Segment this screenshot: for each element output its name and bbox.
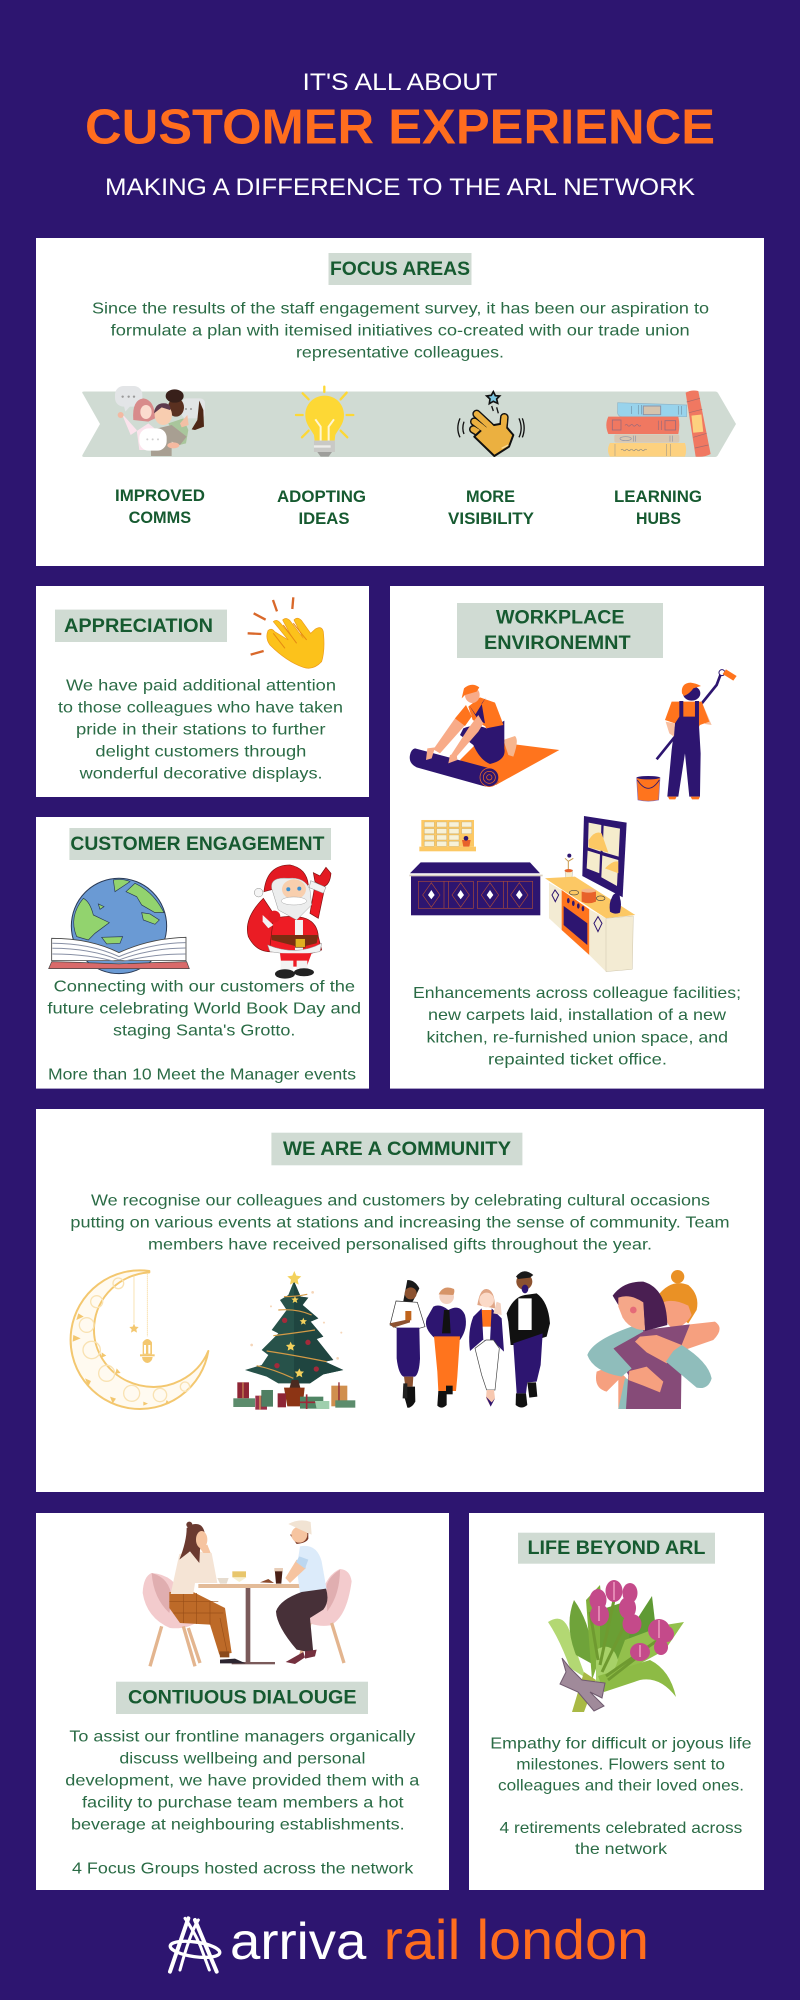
text: life beyond arl <box>490 1735 752 1858</box>
labels: focus items: HUBS <box>636 510 681 528</box>
text: focus areas intro: Since the results of the staff engagement survey, it has been our aspiration to <box>92 300 709 318</box>
icon: stack of books <box>606 390 711 457</box>
text: customer engagement: More than 10 Meet the Manager events <box>48 1066 356 1084</box>
text: continuous dialogue: beverage at neighbouring establishments. <box>71 1817 405 1834</box>
text: appreciation: delight customers through <box>95 744 306 760</box>
logo: arriva rail london: arriva <box>230 1913 366 1971</box>
title block <box>85 69 715 201</box>
heading: appreciation <box>55 610 227 642</box>
icon: santa <box>247 865 331 979</box>
text: focus areas intro <box>92 300 709 362</box>
icon: clapping hands <box>248 597 324 668</box>
heading: appreciation: APPRECIATION <box>64 616 213 637</box>
illustration: group of colleagues <box>389 1271 550 1408</box>
text: customer engagement: staging Santa's Grotto. <box>113 1022 295 1040</box>
text: life beyond arl: colleagues and their loved ones. <box>498 1777 744 1794</box>
panel: continuous dialogue <box>36 1513 449 1890</box>
panel: workplace environment <box>390 586 764 1089</box>
text: continuous dialogue: facility to purchase team members a hot <box>82 1795 404 1812</box>
text: workplace environment: new carpets laid, installation of a new <box>428 1007 726 1024</box>
text: focus areas intro: representative colleagues. <box>296 344 504 362</box>
illustration: christmas tree <box>233 1271 355 1410</box>
heading: focus areas: FOCUS AREAS <box>330 259 470 280</box>
title block: MAKING A DIFFERENCE TO THE ARL NETWORK <box>105 174 695 201</box>
illustration: painter <box>637 669 737 801</box>
text: appreciation: wonderful decorative displays. <box>78 766 323 782</box>
illustration: carpet layer <box>410 685 559 787</box>
heading: customer engagement: CUSTOMER ENGAGEMENT <box>70 834 325 855</box>
text: continuous dialogue: 4 Focus Groups hosted across the network <box>72 1861 414 1878</box>
heading: focus areas <box>328 253 472 285</box>
logo: arriva rail london <box>169 1908 649 1972</box>
panel: appreciation <box>36 586 369 797</box>
labels: focus items: IMPROVED <box>115 487 205 505</box>
panel: customer engagement <box>36 817 369 1089</box>
heading: customer engagement <box>69 828 331 860</box>
illustration: two people hugging <box>587 1270 720 1409</box>
title block: IT'S ALL ABOUT <box>302 69 498 96</box>
text: continuous dialogue: development, we have provided them with a <box>65 1773 419 1790</box>
illustration: two people at a cafe table <box>143 1520 352 1666</box>
heading: workplace environment: WORKPLACE <box>496 608 624 628</box>
text: customer engagement: Connecting with our customers of the <box>54 978 355 996</box>
text: continuous dialogue: To assist our frontline managers organically <box>69 1729 415 1746</box>
icon: people talking <box>115 386 205 456</box>
text: appreciation: pride in their stations to further <box>76 722 326 738</box>
icon: waving hand <box>458 392 524 456</box>
text: appreciation <box>58 678 343 782</box>
panel: we are a community <box>36 1109 764 1492</box>
labels: focus items: VISIBILITY <box>448 510 534 528</box>
heading: continuous dialogue <box>116 1682 368 1714</box>
text: appreciation: to those colleagues who have taken <box>58 700 343 716</box>
text: continuous dialogue: discuss wellbeing and personal <box>119 1751 365 1768</box>
labels: focus items: LEARNING <box>614 488 702 506</box>
text: workplace environment: Enhancements across colleague facilities; <box>413 985 741 1002</box>
text: appreciation: We have paid additional attention <box>66 678 336 694</box>
text: workplace environment: kitchen, re-furnished union space, and <box>426 1030 728 1046</box>
labels: focus items: MORE <box>466 488 515 506</box>
arrow banner <box>82 392 736 457</box>
labels: focus items <box>115 487 702 528</box>
icon: light bulb <box>296 387 353 457</box>
text: workplace environment: repainted ticket office. <box>488 1052 667 1068</box>
heading: life beyond arl <box>518 1533 715 1564</box>
text: customer engagement <box>47 978 361 1084</box>
text: life beyond arl: the network <box>575 1841 668 1858</box>
text: community: putting on various events at stations and increasing the sense of community. Team <box>70 1214 730 1231</box>
labels: focus items: IDEAS <box>298 510 350 528</box>
icon: globe on open book <box>49 878 189 974</box>
panel: focus areas <box>36 238 764 566</box>
text: focus areas intro: formulate a plan with itemised initiatives co-created with our trade union <box>111 322 690 340</box>
text: life beyond arl: Empathy for difficult or joyous life <box>490 1735 752 1752</box>
illustration: shelf and cabinet <box>409 820 543 915</box>
heading: community: WE ARE A COMMUNITY <box>283 1139 511 1160</box>
text: continuous dialogue <box>65 1729 419 1878</box>
text: life beyond arl: milestones. Flowers sent to <box>516 1756 725 1773</box>
heading: workplace environment: ENVIRONEMNT <box>484 633 631 654</box>
panel: life beyond arl <box>469 1513 764 1890</box>
icon: arriva emblem <box>169 1918 221 1972</box>
heading: life beyond arl: LIFE BEYOND ARL <box>528 1538 706 1559</box>
heading: continuous dialogue: CONTIUOUS DIALOUGE <box>128 1688 357 1709</box>
title block: CUSTOMER EXPERIENCE <box>85 100 715 154</box>
illustration: crescent moon with lantern <box>71 1270 208 1409</box>
text: community: members have received personalised gifts throughout the year. <box>148 1236 652 1253</box>
text: workplace environment <box>413 985 741 1068</box>
text: customer engagement: future celebrating World Book Day and <box>47 1000 361 1018</box>
text: life beyond arl: 4 retirements celebrated across <box>500 1820 742 1837</box>
labels: focus items: ADOPTING <box>277 488 366 506</box>
heading: community <box>271 1133 522 1165</box>
text: community <box>70 1192 730 1253</box>
logo: arriva rail london: rail london <box>384 1908 649 1971</box>
text: community: We recognise our colleagues and customers by celebrating cultural occasions <box>91 1192 710 1209</box>
illustration: bouquet of tulips <box>548 1580 684 1712</box>
heading: workplace environment <box>457 603 663 658</box>
labels: focus items: COMMS <box>129 509 191 527</box>
illustration: kitchen and window <box>545 816 635 972</box>
